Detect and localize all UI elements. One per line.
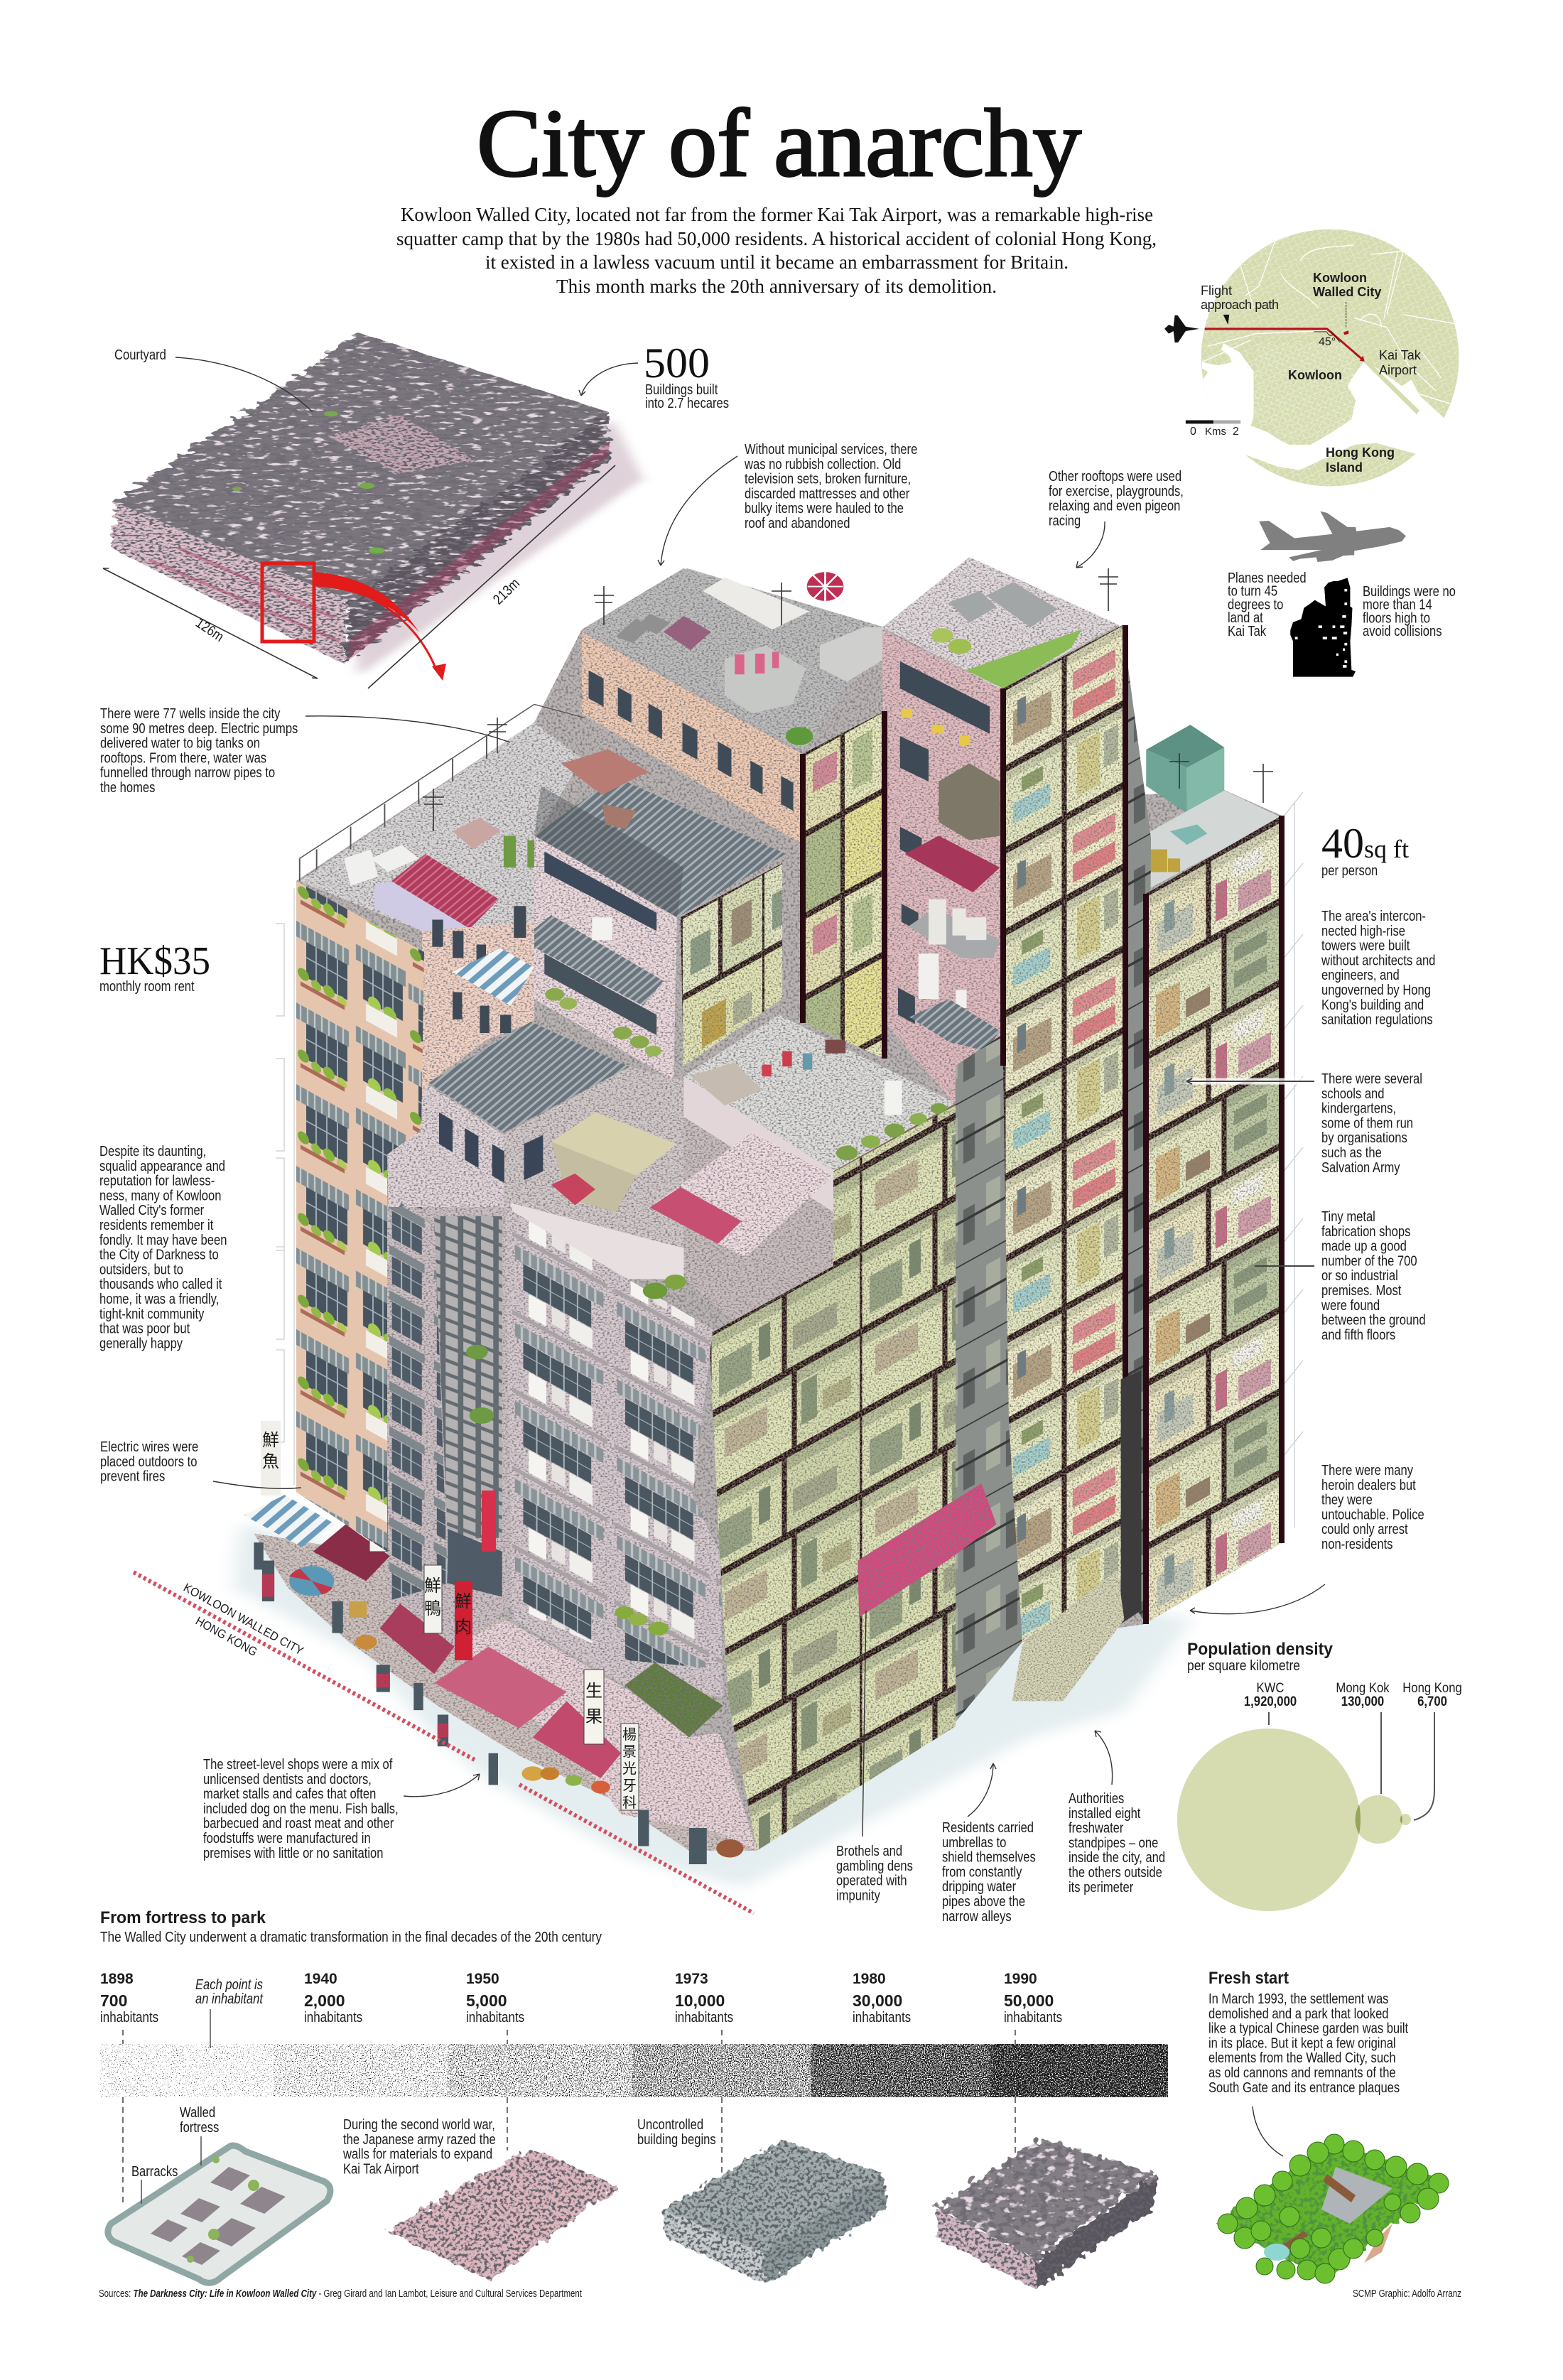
timeline: year labels: inhabitants [1004,2009,1062,2025]
timeline: year labels: 2,000 [304,1991,345,2010]
annotation: wells: rooftops. From there, water was [100,750,266,766]
corrugated roof [429,1022,629,1132]
annotation: standpipes: installed eight [1069,1805,1140,1821]
locator map: Island [1326,460,1363,475]
text: fond memories: residents remember it [99,1217,213,1233]
green canopy [624,1662,723,1737]
grey alleys between blocks [951,625,1151,1728]
Hong Kong bubble [1400,1814,1411,1825]
model: walled fortress 1898 [108,2146,330,2283]
text: fresh start: as old cannons and remnants of the [1208,2065,1396,2080]
locator map: Kai Tak [1379,348,1422,362]
timeline: year labels: 5,000 [466,1991,507,2010]
locator map: Kms [1205,426,1226,438]
building caption [1363,583,1456,639]
back roofs and walls [300,557,1282,1339]
lower pale pink base [451,1620,757,1851]
text: fresh start: In March 1993, the settlement was [1208,1991,1388,2006]
timeline: year labels: inhabitants [304,2009,362,2025]
lower pink wall [388,1067,683,1279]
annotation: street shops: barbecued and roast meat and other [203,1815,394,1832]
illustration: main building cutaway [244,557,1282,1864]
note: each point is an inhabitant: Each point is [195,1976,263,1992]
black drainpipes and barrels [1121,1370,1141,1624]
building caption: avoid collisions [1363,623,1442,639]
street people and goods [254,1542,743,1864]
model: 1970s grey blocks [663,2140,885,2284]
text: fond memories: outsiders, but to [99,1261,183,1277]
signboards with Chinese characters: 果 [585,1707,602,1726]
timeline: year labels: 30,000 [853,1991,902,2010]
timeline: year labels: 1973 [675,1971,708,1987]
annotation: street shops: unlicensed dentists and doctors, [203,1770,372,1787]
signboards with Chinese characters: 鮮 [262,1431,279,1450]
annotation: metal shops: made up a good [1321,1238,1407,1254]
signboards with Chinese characters: 鮮 [424,1576,441,1596]
timeline heading: The Walled City underwent a dramatic transformation in the final decades of the 20th century [100,1930,602,1945]
locator map [1164,229,1459,486]
annotation: wells: delivered water to big tanks on [100,735,260,751]
text: unregulated towers: without architects and [1321,952,1435,968]
model: 1990 dense city [935,2138,1156,2289]
annotation: wells [100,705,510,795]
annotation: standpipes: freshwater [1069,1819,1123,1836]
lower facade and street shops [244,1207,1141,1864]
text: unregulated towers: sanitation regulations [1321,1011,1433,1027]
shop fronts base [254,1533,757,1851]
model: park [1216,2134,1449,2283]
annotation: brothels: impunity [836,1887,880,1903]
model: 1940s pink settlement [386,2148,619,2281]
column labels: 130,000 [1341,1694,1384,1709]
timeline: year labels: 10,000 [675,1991,725,2010]
column labels: 1,920,000 [1244,1694,1297,1709]
maroon awning [313,1525,390,1581]
annotation: standpipes: its perimeter [1069,1878,1133,1895]
dashed timeline connectors [123,2030,1015,2205]
courtyard label: Courtyard [114,347,166,362]
text: fond memories: generally happy [99,1335,183,1351]
text: fond memories: ness, many of Kowloon [99,1187,221,1203]
annotation: standpipes [1069,1731,1165,1895]
column labels: Hong Kong [1402,1680,1462,1695]
annotation: rooftops [1049,468,1184,568]
locator map: Airport [1379,363,1417,377]
timeline: year labels: inhabitants [466,2009,524,2025]
annotation: electric wires: placed outdoors to [100,1453,197,1469]
room sections: middle tower [1003,625,1125,1642]
text: fond memories: fondly. It may have been [99,1231,227,1248]
room sections: lower block [709,1105,956,1851]
annotation: heroin: could only arrest [1321,1521,1408,1537]
annotation: rubbish: bulky items were hauled to the [745,500,904,516]
brothel rooms [858,1483,996,1617]
signboards with Chinese characters: 楊 [622,1726,637,1743]
annotation: metal shops: number of the 700 [1321,1253,1417,1269]
annotation: rubbish: television sets, broken furniture, [745,470,911,487]
annotation: street shops: included dog on the menu. Fish balls, [203,1800,399,1817]
annotation: heroin [1190,1462,1424,1614]
text: second world war: During the second world war, [343,2116,495,2132]
text: uncontrolled building [637,2116,716,2147]
timeline heading: From fortress to park [100,1908,266,1927]
population heading [1187,1640,1334,1674]
teal rooftop hut [1146,725,1224,813]
shaded wall below rooftops [683,1117,840,1339]
annotation: brothels: gambling dens [836,1857,913,1873]
cream shack [551,1113,677,1212]
annotation: umbrellas: Residents carried [942,1819,1034,1835]
annotation: metal shops: were found [1321,1297,1380,1313]
annotation: electric wires: Electric wires were [100,1439,198,1454]
street boundary dashed line [134,1572,754,1913]
text: uncontrolled building: building begins [637,2131,716,2147]
column labels: Mong Kok [1336,1680,1390,1695]
text: fond memories: Despite its daunting, [99,1143,206,1159]
annotation: metal shops: and fifth floors [1321,1326,1395,1343]
icon: grey plane silhouette [1259,512,1406,562]
annotation: standpipes: inside the city, and [1069,1849,1165,1866]
text: fond memories: reputation for lawless- [99,1172,215,1189]
label: walled fortress and barracks: Barracks [131,2163,178,2179]
pink awning 3 [533,1701,621,1778]
annotation: electric wires: prevent fires [100,1468,165,1484]
annotation: rubbish: roof and abandoned [745,515,850,531]
credit: SCMP Graphic: Adolfo Arranz [1353,2288,1461,2300]
pink-white roof [650,1132,833,1257]
annotation: electric wires [100,1439,301,1488]
signboards with Chinese characters: 科 [622,1795,637,1811]
timeline: year labels: inhabitants [675,2009,733,2025]
text: uncontrolled building: Uncontrolled [637,2116,703,2132]
text: fond memories: thousands who called it [99,1276,222,1292]
text: second world war [342,2116,496,2177]
rooftop with garden [882,557,1119,688]
children's rooftop [683,1015,956,1212]
population heading: per square kilometre [1187,1658,1300,1674]
plane caption: degrees to [1228,596,1283,612]
text: fond memories: tight-knit community [99,1305,205,1321]
annotation: rooftops: racing [1049,512,1081,529]
text: fresh start: like a typical Chinese garden was built [1208,2020,1408,2036]
annotation: rooftops: Other rooftops were used [1049,468,1181,484]
annotation: schools: by organisations [1321,1130,1407,1146]
annotation: umbrellas: shield themselves [942,1849,1036,1865]
stat: 40 sq ft: per person [1321,862,1378,878]
annotation: street shops: premises with little or no sanitation [203,1844,383,1861]
text: fresh start: South Gate and its entrance plaques [1208,2079,1400,2095]
intro text: it existed in a lawless vacuum until it became an embarrassment for Britain. [485,251,1069,273]
dimension: 213m [368,465,615,688]
icon: building silhouette [1290,578,1356,677]
label: walled fortress and barracks: fortress [180,2119,219,2135]
intro text [396,204,1157,297]
intro text: squatter camp that by the 1980s had 50,000 residents. A historical accident of colonial Hong Kong, [396,228,1157,249]
locator map: Walled City [1313,285,1381,299]
annotation: street shops: foodstuffs were manufactured in [203,1830,371,1846]
stat: monthly rent: HK$35 [99,939,210,983]
annotation: rubbish [658,441,917,566]
stat: monthly rent: monthly room rent [99,978,195,994]
text: fond memories: home, it was a friendly, [99,1291,219,1307]
annotation: heroin: non-residents [1321,1536,1392,1552]
text: unregulated towers [1321,908,1435,1027]
text: fond memories [99,1143,227,1351]
building caption: more than 14 [1363,596,1432,612]
pillars [803,625,1282,1624]
stat: 500 buildings: Buildings built [645,382,718,397]
rooftop with rubbish [582,568,885,752]
column labels: 6,700 [1417,1694,1447,1709]
annotation: brothels: Brothels and [836,1843,902,1859]
annotation: schools: such as the [1321,1145,1382,1160]
annotation: schools: schools and [1321,1085,1385,1101]
Mong Kok bubble [1354,1795,1402,1844]
text: unregulated towers: engineers, and [1321,967,1400,983]
rooftop antennas [423,568,1273,831]
room sections: salmon tower [803,711,885,1059]
text: fresh start: demolished and a park that looked [1208,2005,1389,2021]
stat: 40 sq ft: 40sq ft [1321,820,1409,867]
annotation: metal shops: premises. Most [1321,1282,1401,1298]
population heading: Population density [1187,1640,1334,1659]
boundary labels: KOWLOON WALLED CITY [181,1581,305,1658]
salmon wall with windows [582,632,803,845]
signboards with Chinese characters: 光 [622,1760,637,1777]
locator map: 2 [1233,426,1239,438]
timeline: year labels [100,1971,1062,2025]
timeline: year labels: 1990 [1004,1971,1037,1987]
timeline: year labels: 50,000 [1004,1991,1054,2010]
annotation: metal shops: fabrication shops [1321,1223,1410,1239]
note: each point is an inhabitant [195,1976,264,2048]
alley shop [1012,1569,1124,1701]
stat: 500 buildings: into 2.7 hecares [645,395,729,411]
timeline: year labels: 1898 [100,1971,134,1987]
locator map: Kowloon [1288,368,1342,382]
annotation: heroin: untouchable. Police [1321,1506,1424,1522]
timeline: year labels: 1980 [853,1971,886,1987]
note: each point is an inhabitant: an inhabitant [195,1991,264,2006]
annotation: brothels: operated with [836,1872,907,1888]
annotation: heroin: There were many [1321,1462,1414,1478]
text: fond memories: the City of Darkness to [99,1246,219,1262]
locator map: Flight [1201,283,1232,298]
timeline: year labels: inhabitants [100,2009,158,2025]
room sections: right tower [1145,816,1282,1624]
annotation: heroin: heroin dealers but [1321,1476,1416,1493]
text: fond memories: Walled City's former [99,1202,204,1218]
locator map: 45° [1319,336,1336,348]
text: fond memories: squalid appearance and [99,1157,225,1174]
annotation: rubbish: discarded mattresses and other [745,485,909,502]
peach mid wall [422,906,534,1135]
source note: Sources: The Darkness City: Life in Kowloon Walled City - Greg Girard and Ian Lambot, Leisure and Cultural Services Department [99,2288,583,2300]
pink awning 1 [379,1603,455,1674]
back left rooftop [300,704,650,931]
boundary labels: HONG KONG [193,1614,259,1659]
annotation: metal shops: between the ground [1321,1311,1426,1328]
KWC bubble [1177,1729,1360,1911]
dimension: 126m [103,568,318,678]
annotation: schools: Salvation Army [1321,1159,1400,1175]
signboards with Chinese characters: 肉 [455,1618,472,1637]
annotation: schools: kindergartens, [1321,1100,1396,1116]
plane caption [1228,570,1307,639]
pink tower wall [882,629,1005,1105]
leader lines [1269,1712,1434,1820]
signboards with Chinese characters: 牙 [622,1778,637,1794]
text: fresh start: in its place. But it kept a few original [1208,2035,1396,2051]
locator map: Kowloon [1313,271,1367,285]
annotation: metal shops: or so industrial [1321,1267,1398,1284]
annotation: umbrellas: narrow alleys [942,1908,1012,1924]
timeline: year labels: inhabitants [853,2009,911,2025]
annotation: umbrellas: dripping water [942,1878,1016,1895]
timeline heading [100,1908,602,1945]
signboards with Chinese characters [261,1421,639,1811]
text: second world war: walls for materials to expand [342,2146,492,2162]
signboards with Chinese characters: 鴨 [424,1599,441,1618]
plane caption: Planes needed [1228,570,1307,585]
street ground wash [234,1525,1192,1887]
intro text: Kowloon Walled City, located not far from the former Kai Tak Airport, was a remarkable high-rise [401,204,1153,225]
signboards with Chinese characters: 果 [369,1514,386,1533]
dimension: 213m: 213m [490,575,523,607]
annotation: standpipes: standpipes – one [1069,1834,1158,1851]
annotation: schools: some of them run [1321,1115,1413,1131]
plane caption: Kai Tak [1228,622,1267,639]
faint hatching left and right of building [276,792,1303,1527]
annotation: wells: the homes [100,779,155,795]
bubble overlaps [1356,1805,1402,1834]
building backdrop silhouette [296,559,1282,1851]
corrugated grey roof [534,750,786,917]
locator map: Hong Kong [1326,445,1395,460]
signboards with Chinese characters: 生 [369,1491,386,1510]
plane caption: land at [1228,610,1263,625]
annotation: standpipes: Authorities [1069,1790,1124,1806]
annotation: street shops [203,1756,480,1861]
annotation: rubbish: was no rubbish collection. Old [744,455,901,472]
building caption: Buildings were no [1363,583,1456,599]
timeline: year labels: 1940 [304,1971,337,1987]
annotation: standpipes: the others outside [1069,1864,1162,1880]
annotation: brothels [836,1611,913,1903]
text: unregulated towers: ungoverned by Hong [1321,982,1431,997]
text: unregulated towers: Kong's building and [1321,996,1424,1012]
annotation: wells: funnelled through narrow pipes to [100,764,275,781]
annotation: metal shops [1255,1208,1426,1343]
building caption: floors high to [1363,610,1430,626]
dot density band [100,2044,1168,2097]
annotation: heroin: they were [1321,1491,1373,1508]
pink building balconies [466,1207,723,1697]
annotation: rubbish: Without municipal services, there [745,441,917,457]
column labels: KWC [1257,1680,1285,1695]
annotation: umbrellas: umbrellas to [942,1834,1006,1850]
umbrella [289,1566,334,1596]
annotation: schools: There were several [1321,1071,1422,1086]
timeline: year labels: 700 [100,1991,127,2010]
text: second world war: the Japanese army razed the [343,2131,496,2147]
blue striped awning [244,1495,335,1547]
aerial model of the walled city [112,333,643,681]
text: fond memories: that was poor but [99,1320,190,1336]
population density chart [1177,1640,1462,1911]
annotation: umbrellas: pipes above the [942,1893,1025,1909]
annotation: street shops: The street-level shops were a mix of [203,1756,393,1772]
pink building grid [386,1207,512,1647]
text: second world war: Kai Tak Airport [343,2160,419,2177]
locator map: approach path [1201,298,1279,312]
text: fresh start: elements from the Walled City, such [1208,2050,1396,2066]
annotation: metal shops: Tiny metal [1321,1208,1375,1224]
annotation: wells: There were 77 wells inside the city [100,705,281,721]
text: unregulated towers: nected high-rise [1321,922,1405,939]
stat: 500 buildings: 500 [644,340,710,386]
courtyard label [114,347,313,412]
signboards with Chinese characters: 生 [585,1682,602,1701]
signboards with Chinese characters: 魚 [262,1452,279,1471]
plane caption: to turn 45 [1228,583,1277,599]
pink wall below roof [521,835,677,1081]
text: fresh start: Fresh start [1208,1969,1289,1988]
annotation: rooftops: for exercise, playgrounds, [1049,482,1184,499]
label: walled fortress and barracks [131,2104,219,2204]
right rooftop [1126,791,1282,890]
annotation: schools [1186,1071,1422,1175]
timeline: year labels: 1950 [466,1971,499,1987]
text: unregulated towers: towers were built [1321,937,1410,953]
text: unregulated towers: The area's intercon- [1321,908,1426,924]
locator map: 0 [1190,426,1196,438]
signboards with Chinese characters: 景 [622,1744,637,1760]
annotation: wells: some 90 metres deep. Electric pumps [100,720,298,736]
annotation: umbrellas: from constantly [942,1864,1022,1880]
pink awning 2 [434,1647,567,1729]
annotation: street shops: market stalls and cafes that often [203,1785,376,1802]
dimension: 126m: 126m [193,615,227,644]
text: fresh start [1208,1969,1408,2156]
annotation: umbrellas [942,1763,1036,1924]
room sections: upper left [681,863,782,1066]
column labels [1244,1680,1462,1709]
label: walled fortress and barracks: Walled [180,2104,215,2120]
peach tower [296,881,424,1552]
stat: 500 buildings [579,340,729,411]
intro text: This month marks the 20th anniversary of its demolition. [556,276,997,297]
title: City of anarchy [477,90,1081,197]
signboards with Chinese characters: 鮮 [455,1592,472,1611]
annotation: rooftops: relaxing and even pigeon [1049,497,1180,514]
